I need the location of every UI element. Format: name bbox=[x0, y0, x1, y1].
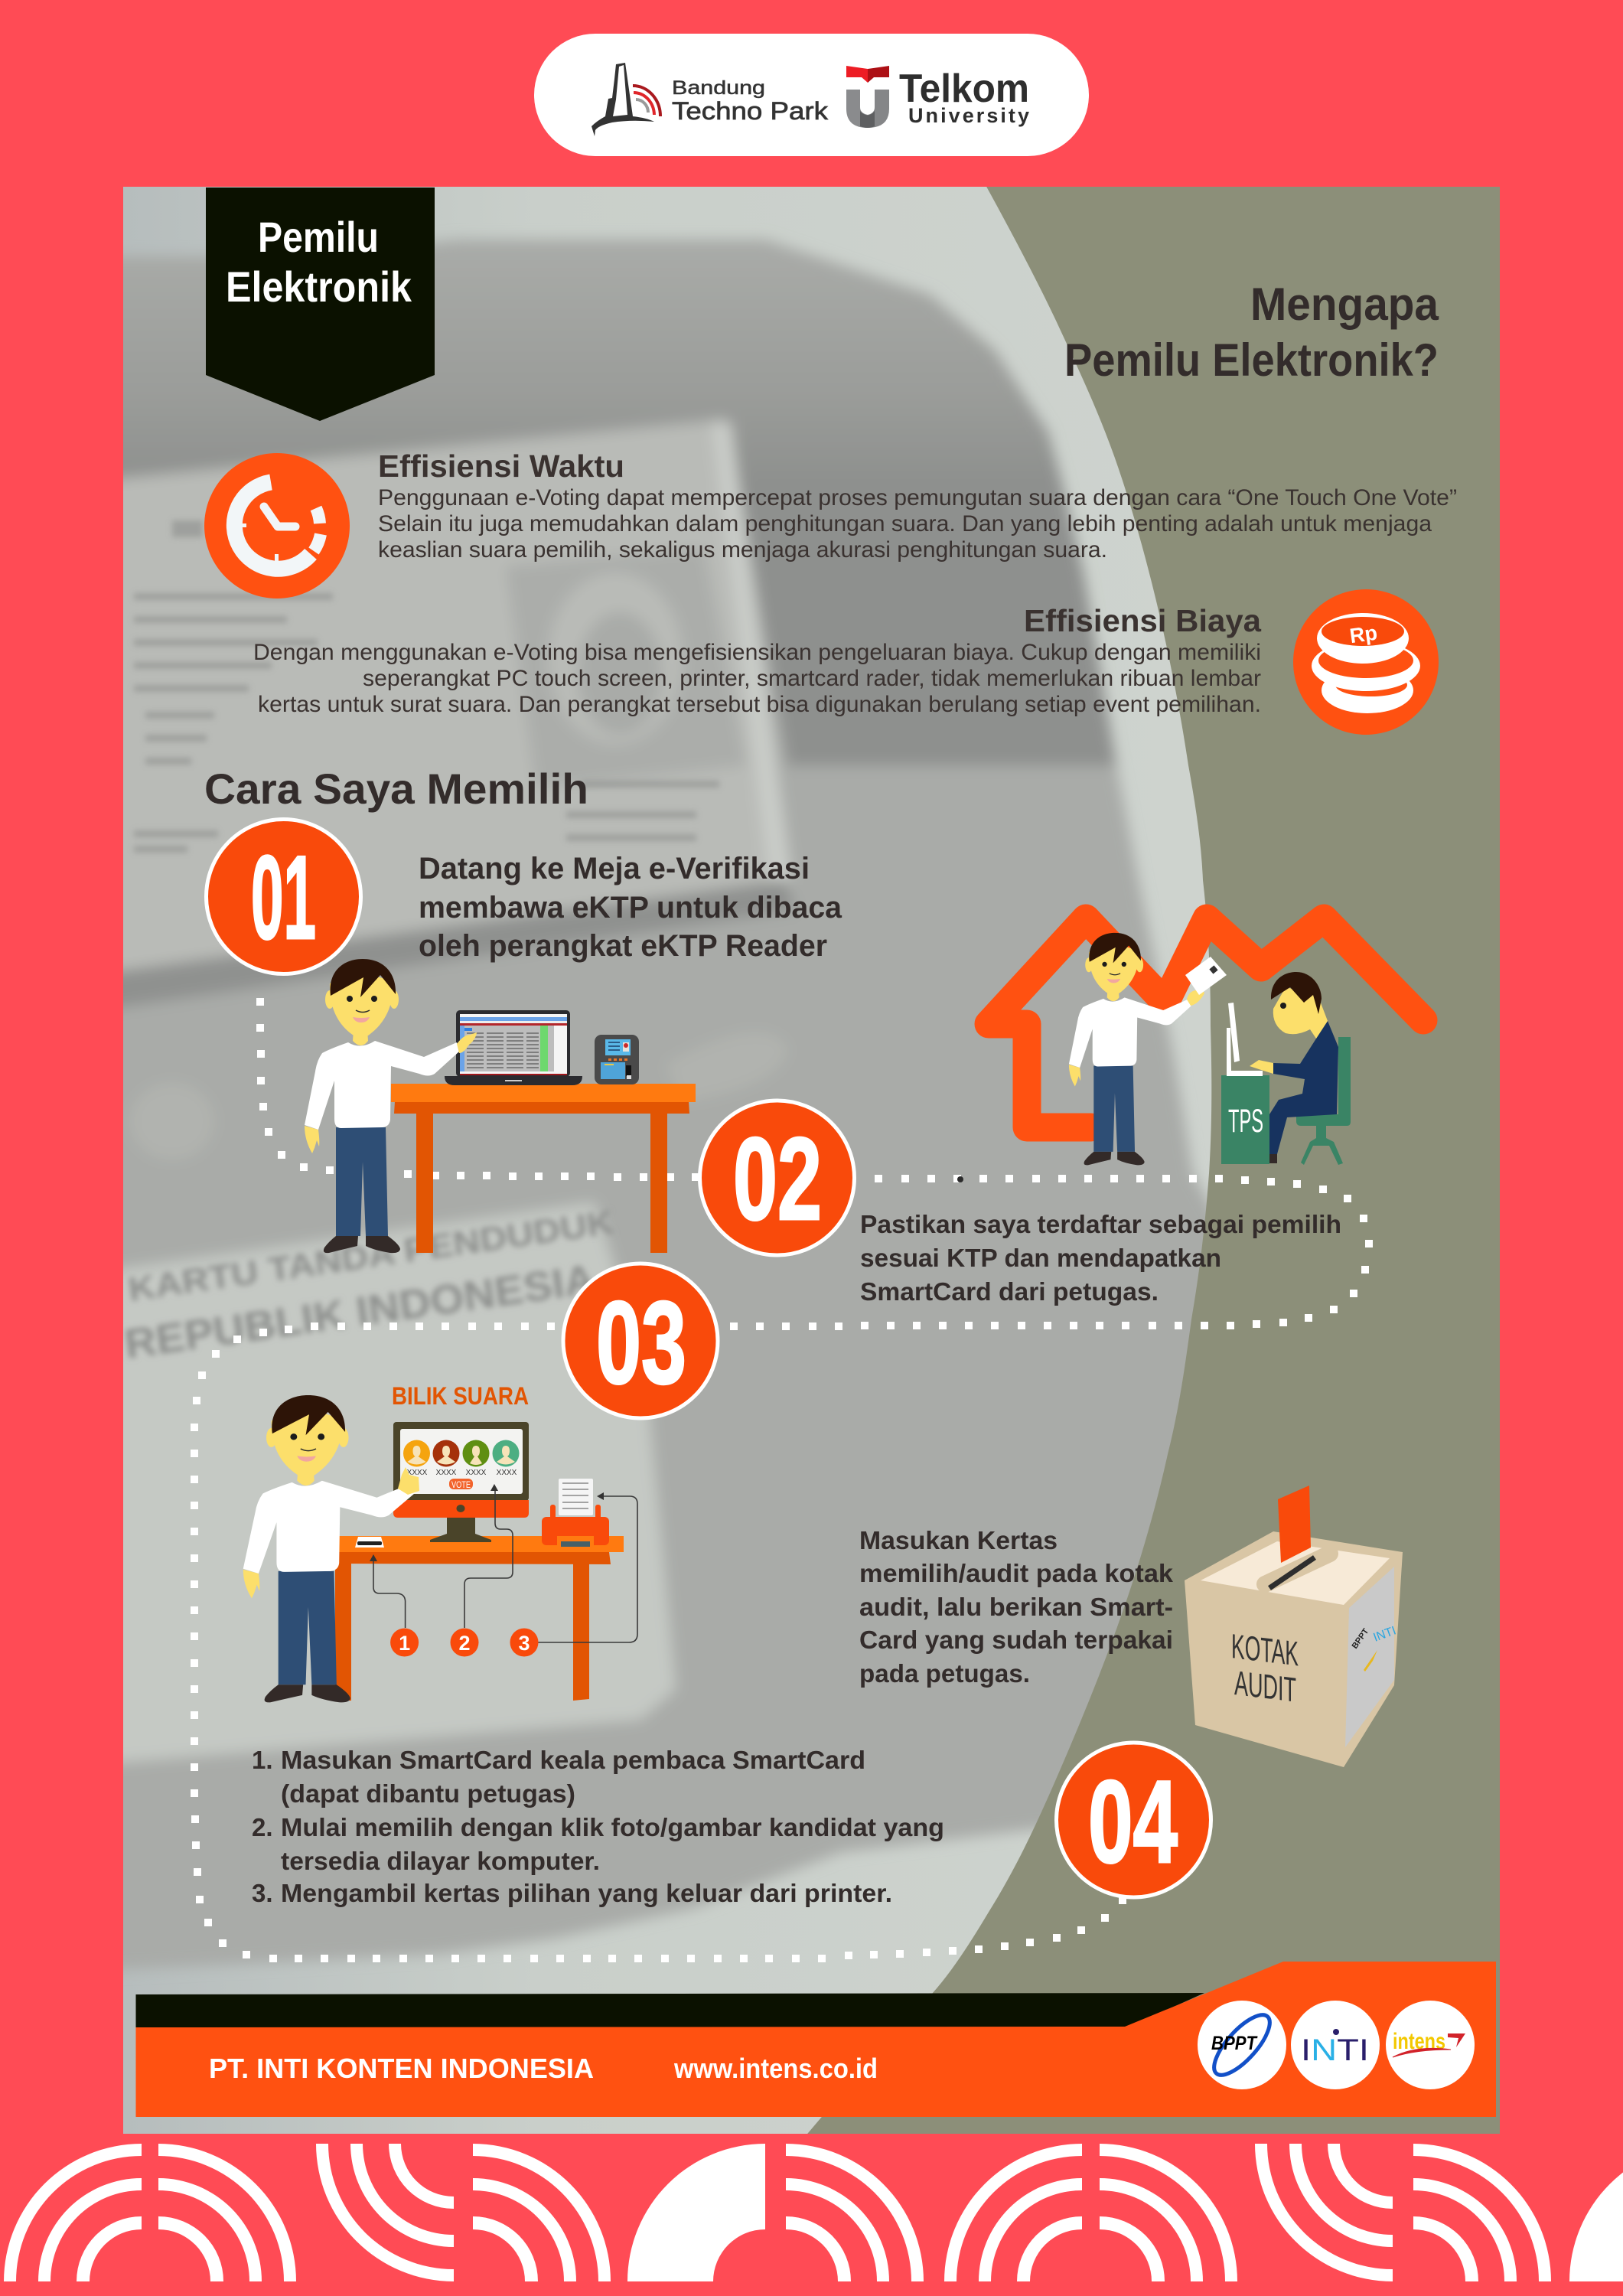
step 02 text: sesuai KTP dan mendapatkan bbox=[860, 1244, 1221, 1272]
label: bilik suara: BILIK SUARA bbox=[392, 1382, 529, 1410]
voter bbox=[243, 1395, 419, 1702]
step 03 list: 3. bbox=[252, 1879, 273, 1907]
printer bbox=[542, 1479, 609, 1547]
logo: intens bbox=[1386, 2001, 1475, 2089]
step 03 list: 1. bbox=[252, 1746, 273, 1774]
step 01 eKTP reader bbox=[595, 1035, 639, 1084]
step 04 audit box: AUDIT bbox=[1234, 1663, 1296, 1710]
icon: coins Rp: Rp bbox=[1348, 621, 1379, 647]
step 01 text bbox=[419, 852, 842, 963]
step 03 list: Mulai memilih dengan klik foto/gambar kandidat yang bbox=[281, 1813, 944, 1841]
step 04 text bbox=[859, 1526, 1174, 1688]
step 01 person bbox=[305, 959, 477, 1253]
step 04 audit box: KOTAK bbox=[1231, 1626, 1299, 1674]
step 01 text: membawa eKTP untuk dibaca bbox=[419, 891, 842, 925]
text block: Effisiensi Biaya: Effisiensi Biaya bbox=[1024, 603, 1262, 638]
step 02 badge bbox=[699, 1101, 854, 1255]
text block: Effisiensi Waktu: Effisiensi Waktu bbox=[378, 448, 624, 484]
heading: Cara Saya Memilih: Cara Saya Memilih bbox=[204, 765, 588, 813]
logo: Bandung Techno Park: Techno Park bbox=[672, 97, 829, 125]
monitor: VOTE bbox=[451, 1479, 471, 1490]
route marker dot bbox=[957, 1176, 963, 1182]
main panel background with blurred eKTP photo and olive curve: KARTU TANDA PENDUDUK bbox=[126, 1203, 616, 1309]
step 04 badge bbox=[1056, 1743, 1211, 1897]
icon: coins Rp bbox=[1293, 589, 1439, 735]
numbered callouts: 3 bbox=[518, 1632, 530, 1655]
main panel background with blurred eKTP photo and olive curve bbox=[99, 184, 1507, 2143]
text block: Effisiensi Waktu: Penggunaan e-Voting dapat mempercepat proses pemungutan suara dengan cara “One Touch One Vote” bbox=[378, 485, 1457, 510]
footer text: website: www.intens.co.id bbox=[673, 2053, 878, 2084]
main panel background with blurred eKTP photo and olive curve: REPUBLIK INDONESIA bbox=[122, 1256, 598, 1368]
step 03 list: Mengambil kertas pilihan yang keluar dari printer. bbox=[281, 1879, 892, 1907]
step 04 text: audit, lalu berikan Smart- bbox=[859, 1593, 1173, 1621]
numbered callouts: 2 bbox=[458, 1632, 471, 1655]
monitor: XXXX bbox=[436, 1469, 457, 1477]
step 04 audit box: INTI bbox=[1372, 1624, 1398, 1645]
logo: Bandung Techno Park: Bandung bbox=[672, 77, 765, 99]
step 03 list: (dapat dibantu petugas) bbox=[281, 1779, 575, 1808]
heading: Mengapa Pemilu Elektronik: Pemilu Elektronik? bbox=[1064, 334, 1439, 386]
text block: Effisiensi Biaya: seperangkat PC touch screen, printer, smartcard rader, tidak memerlukan ribuan lembar bbox=[363, 666, 1261, 691]
numbered callouts bbox=[370, 1484, 637, 1656]
step 03 illustration: voting booth bbox=[243, 1395, 637, 1702]
text block: Effisiensi Waktu: Selain itu juga memudahkan dalam penghitungan suara. Dan yang lebih penting adalah untuk menjaga bbox=[378, 511, 1432, 536]
TPS desk: TPS bbox=[1228, 1103, 1263, 1140]
dotted route connecting steps bbox=[191, 998, 1373, 1962]
step 04 audit box: BPPT bbox=[1351, 1627, 1370, 1651]
monitor: XXXX bbox=[497, 1469, 517, 1477]
footer text: company: PT. INTI KONTEN INDONESIA bbox=[209, 2053, 594, 2084]
ribbon title: Pemilu bbox=[258, 213, 379, 261]
step 04 audit box bbox=[1185, 1486, 1403, 1767]
step 03 list: Masukan SmartCard keala pembaca SmartCard bbox=[281, 1746, 865, 1774]
step 04 text: Card yang sudah terpakai bbox=[859, 1626, 1173, 1654]
step 04 text: memilih/audit pada kotak bbox=[859, 1559, 1174, 1587]
monitor: XXXX bbox=[407, 1469, 428, 1477]
step 02 badge: 02 bbox=[733, 1114, 822, 1244]
logo: Bandung Techno Park bbox=[592, 63, 829, 136]
step 02 text: SmartCard dari petugas. bbox=[860, 1277, 1159, 1306]
bottom arc pattern bbox=[4, 2144, 1623, 2281]
text block: Effisiensi Waktu: keaslian suara pemilih, sekaligus menjaga akurasi penghitungan suara. bbox=[378, 537, 1107, 563]
footer banner bbox=[136, 1962, 1496, 2117]
text block: Effisiensi Biaya: Dengan menggunakan e-Voting bisa mengefisiensikan pengeluaran biaya. Cukup dengan memiliki bbox=[253, 640, 1261, 665]
smartcard reader bbox=[355, 1537, 384, 1548]
top logo pill bbox=[534, 34, 1089, 156]
step 01 table bbox=[391, 1084, 696, 1253]
step 03 list bbox=[252, 1746, 944, 1907]
text block: Effisiensi Biaya: kertas untuk surat suara. Dan perangkat tersebut bisa digunakan berulang setiap event pemilihan. bbox=[258, 692, 1261, 717]
table bbox=[335, 1536, 624, 1701]
step 03 badge: 03 bbox=[596, 1277, 686, 1408]
step 02 illustration: house with clerk bbox=[989, 918, 1423, 1165]
monitor bbox=[393, 1422, 529, 1542]
logo: INTI: INTI bbox=[1301, 2033, 1369, 2067]
logo: INTI bbox=[1291, 2001, 1380, 2089]
logo: Telkom University: University bbox=[908, 104, 1029, 127]
step 04 badge: 04 bbox=[1088, 1756, 1178, 1887]
text block: Effisiensi Biaya bbox=[253, 603, 1262, 717]
logo: intens: intens bbox=[1393, 2029, 1445, 2054]
logo: BPPT bbox=[1198, 2001, 1286, 2089]
logo: Telkom University: Telkom bbox=[899, 67, 1029, 111]
step 03 badge bbox=[563, 1264, 718, 1418]
ribbon title bbox=[206, 188, 435, 421]
clerk bbox=[1250, 972, 1338, 1163]
ribbon title: Elektronik bbox=[226, 263, 412, 311]
step 03 list: tersedia dilayar komputer. bbox=[281, 1847, 600, 1875]
logo: BPPT: BPPT bbox=[1211, 2033, 1258, 2054]
monitor bbox=[1227, 1003, 1263, 1076]
logo: Telkom University bbox=[846, 66, 1029, 128]
heading: Mengapa Pemilu Elektronik: Mengapa bbox=[1250, 279, 1439, 330]
voter bbox=[1069, 933, 1227, 1165]
text block: Effisiensi Waktu bbox=[378, 448, 1457, 563]
TPS desk bbox=[1221, 1075, 1269, 1164]
step 01 text: oleh perangkat eKTP Reader bbox=[419, 929, 827, 963]
step 02 text bbox=[860, 1210, 1341, 1306]
step 01 badge bbox=[207, 819, 361, 974]
step 04 text: pada petugas. bbox=[859, 1659, 1030, 1688]
clerk chair bbox=[1296, 1037, 1351, 1165]
step 01 laptop bbox=[445, 1010, 582, 1085]
monitor: XXXX bbox=[466, 1469, 487, 1477]
icon: clock bbox=[204, 453, 350, 598]
step 01 text: Datang ke Meja e-Verifikasi bbox=[419, 852, 810, 885]
step 02 text: Pastikan saya terdaftar sebagai pemilih bbox=[860, 1210, 1341, 1238]
heading: Mengapa Pemilu Elektronik bbox=[1064, 279, 1439, 386]
step 01 badge: 01 bbox=[251, 831, 316, 964]
step 03 list: 2. bbox=[252, 1813, 273, 1841]
step 04 text: Masukan Kertas bbox=[859, 1526, 1058, 1554]
numbered callouts: 1 bbox=[399, 1632, 410, 1655]
